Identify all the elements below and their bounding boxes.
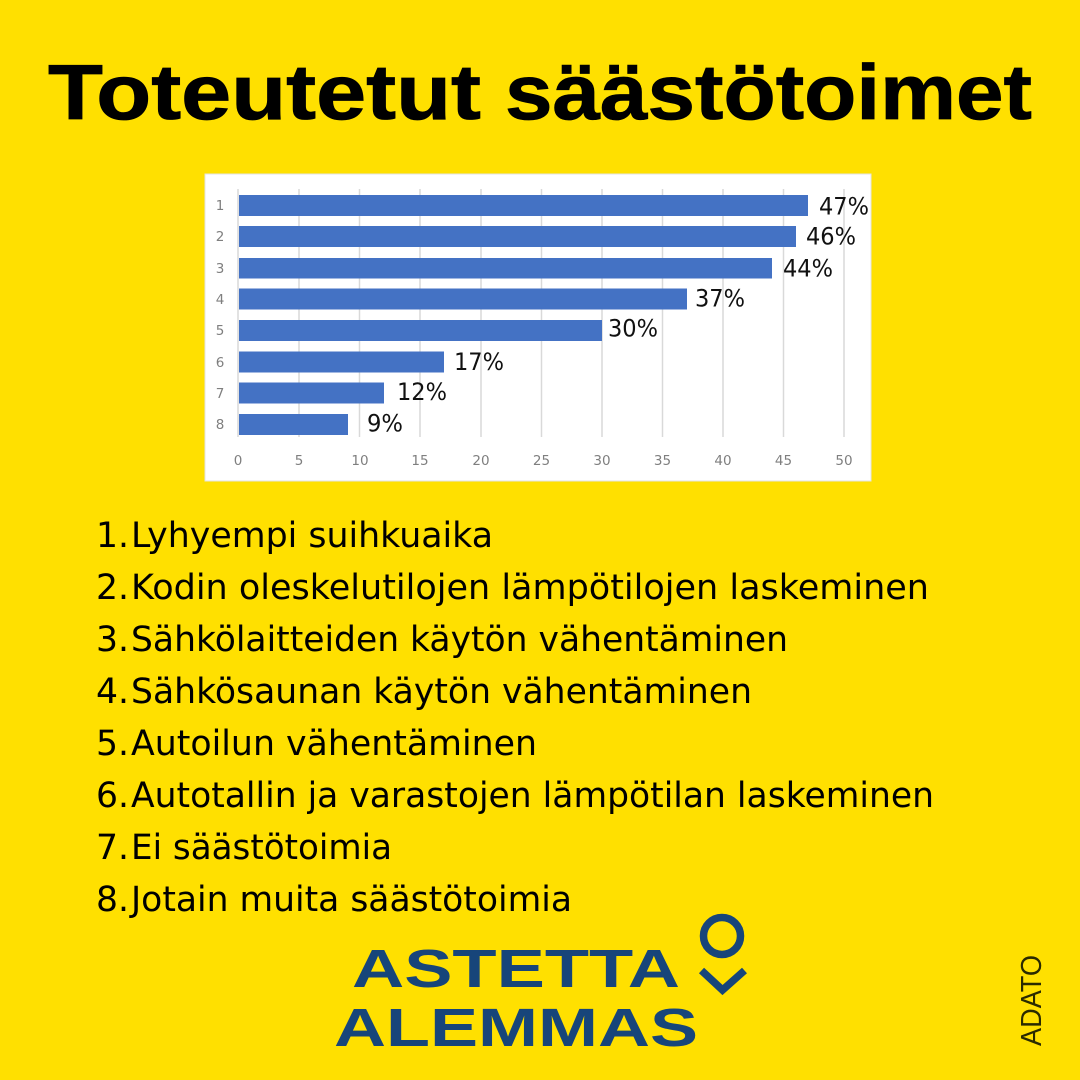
numbered list: Jotain muita säästötoimia — [129, 880, 572, 920]
value axis labels: 40 — [714, 453, 732, 469]
value labels: 46% — [806, 222, 856, 250]
icon: circle and down chevron — [702, 918, 744, 990]
value axis labels: 30 — [593, 453, 611, 469]
value labels: 47% — [819, 192, 869, 220]
logo: Astetta alemmas: ALEMMAS — [334, 998, 698, 1058]
category axis labels — [216, 198, 224, 433]
value axis labels: 10 — [351, 453, 369, 469]
numbered list: 7. — [96, 828, 129, 868]
numbered list: 4. — [96, 672, 129, 712]
value axis labels: 5 — [295, 453, 303, 469]
category axis labels: 1 — [216, 198, 224, 214]
category axis labels: 5 — [216, 323, 224, 339]
numbered list: Ei säästötoimia — [131, 828, 392, 868]
value labels — [367, 192, 869, 438]
category axis labels: 4 — [216, 292, 224, 308]
value labels: 9% — [367, 410, 403, 438]
numbered list — [96, 516, 934, 920]
numbered list: Autoilun vähentäminen — [131, 724, 537, 764]
value labels: 44% — [783, 254, 833, 282]
credit: ADATO: ADATO — [1016, 955, 1048, 1046]
bars — [239, 195, 808, 435]
category axis labels: 8 — [216, 417, 224, 433]
numbered list: Lyhyempi suihkuaika — [131, 516, 493, 556]
value axis labels: 25 — [533, 453, 550, 469]
title — [48, 48, 1032, 136]
numbered list: 8. — [96, 880, 129, 920]
numbered list: Sähkösaunan käytön vähentäminen — [131, 672, 752, 712]
category axis labels: 6 — [216, 355, 224, 371]
numbered list: 3. — [96, 620, 129, 660]
numbered list: 6. — [96, 776, 129, 816]
value axis labels — [234, 453, 853, 469]
value axis labels: 45 — [775, 453, 792, 469]
title: Toteutetut — [48, 48, 481, 136]
numbered list: 2. — [96, 568, 129, 608]
value labels: 12% — [397, 378, 447, 406]
numbered list: Autotallin ja varastojen lämpötilan laskeminen — [131, 776, 934, 816]
logo: Astetta alemmas: ASTETTA — [352, 939, 680, 999]
category axis labels: 3 — [216, 261, 224, 277]
value axis labels: 20 — [472, 453, 490, 469]
category axis labels: 7 — [216, 386, 224, 402]
numbered list: Sähkölaitteiden käytön vähentäminen — [131, 620, 788, 660]
value axis labels: 0 — [234, 453, 242, 469]
numbered list: Kodin oleskelutilojen lämpötilojen laskeminen — [131, 568, 929, 608]
value axis labels: 35 — [654, 453, 671, 469]
category axis labels: 2 — [216, 229, 224, 245]
value axis labels: 15 — [411, 453, 429, 469]
logo: Astetta alemmas — [334, 918, 744, 1058]
value axis labels: 50 — [835, 453, 853, 469]
value labels: 30% — [608, 314, 658, 342]
numbered list: 1. — [96, 516, 129, 556]
bar chart panel — [205, 174, 871, 481]
numbered list: 5. — [96, 724, 129, 764]
value labels: 17% — [454, 348, 504, 376]
title: säästötoimet — [505, 48, 1032, 136]
value labels: 37% — [695, 284, 745, 312]
